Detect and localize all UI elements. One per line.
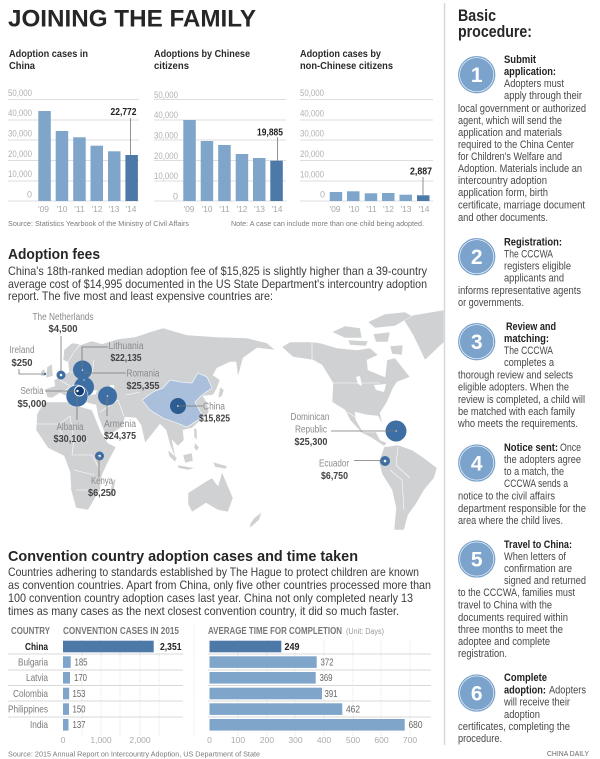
text block: convention intro: 100 convention country adoption cases last year. China not only completed nearly 13 [8, 591, 413, 605]
label: Romania: Romania [126, 368, 160, 380]
axis: days: 300 [288, 735, 303, 745]
axis labels: 30,000 [8, 128, 32, 138]
label: The Netherlands: The Netherlands [32, 312, 94, 323]
axis labels: 30,000 [154, 130, 178, 140]
text block: adoption fees intro: average cost of $14,995 documented in the US State Department's intercountry adoption [8, 277, 427, 291]
heading: procedure: [458, 23, 532, 41]
heading: non-Chinese citizens [300, 60, 393, 72]
map land masses [36, 310, 444, 530]
step 5: travel to China with the [458, 600, 552, 612]
step 4: CCCWA sends a [504, 478, 569, 490]
step 5: registration. [458, 648, 507, 660]
axis labels: 40,000 [8, 108, 32, 118]
step 2: registers eligible [504, 260, 571, 272]
label: Ecuador: $6,750 [321, 470, 348, 482]
year labels [38, 204, 137, 214]
source note: Source: Statistics Yearbook of the Ministry of Civil Affairs [8, 219, 189, 228]
year labels: '13 [254, 204, 265, 214]
step 2: informs representative agents [458, 285, 581, 297]
label: Serbia [18, 386, 47, 410]
year labels: '14 [271, 204, 283, 214]
step 5: three months to meet the [458, 624, 563, 636]
bars [330, 191, 430, 201]
country names: Latvia [26, 672, 48, 684]
label: Dominican Republic: $25,300 [294, 436, 328, 448]
axis labels: 10,000 [300, 170, 324, 180]
step 6: procedure. [458, 733, 502, 745]
step 1 [458, 54, 586, 224]
axis labels: 50,000 [300, 88, 324, 98]
label: Ecuador: Ecuador [319, 458, 350, 470]
step 3: who meets the requirements. [457, 418, 578, 430]
label: Albania [54, 422, 87, 445]
icon: number 1: 1 [471, 64, 483, 87]
step 3: Review and [506, 321, 556, 333]
axis: cases [61, 735, 151, 745]
label: Armenia [104, 419, 136, 442]
axis labels: 20,000 [8, 149, 32, 159]
axis: cases: 0 [61, 735, 66, 745]
axis: days: 500 [346, 735, 360, 745]
step 4: area where the child lives. [458, 515, 563, 527]
bars [38, 111, 138, 201]
panel: basic procedure [457, 7, 586, 745]
step 1: Adopters must [504, 78, 564, 90]
step 4: to a match, the [504, 466, 564, 478]
step 1: Submit [504, 54, 536, 66]
step 1: apply through their [504, 90, 582, 102]
year labels: '10 [201, 204, 213, 214]
country names: Colombia [13, 688, 48, 700]
bar chart: average time: 249 [284, 641, 300, 653]
label: Albania: $30,100 [54, 433, 87, 445]
bar chart: average time: 391 [324, 688, 338, 700]
label: Dominican Republic: Republic [295, 424, 327, 436]
bar chart: average time: 680 [408, 719, 423, 731]
step 5: Travel to China: [504, 539, 572, 551]
step 3: eligible adopters. When the [458, 382, 569, 394]
title: JOINING THE FAMILY [8, 6, 256, 32]
label: The Netherlands [32, 312, 94, 335]
label: Serbia: Serbia [20, 386, 44, 397]
step 5: documents required within [458, 612, 568, 624]
axis: days [207, 735, 417, 745]
text block: adoption fees intro: China's 18th-ranked median adoption fee of $15,825 is slightly higher than a 39-country [8, 264, 427, 278]
year labels: '11 [74, 204, 85, 214]
table headers: CONVENTION CASES IN 2015 [63, 626, 179, 637]
heading: Basic [458, 7, 496, 25]
bubbles [44, 360, 407, 466]
label: Lithuania [108, 341, 144, 364]
year labels [183, 204, 283, 214]
step 6: Adopters [549, 684, 586, 696]
step 3: completes a [504, 357, 555, 369]
leader lines [19, 336, 396, 477]
axis labels: 40,000 [154, 110, 178, 120]
step 5: signed and returned [504, 575, 586, 587]
year labels: '12 [91, 204, 103, 214]
step 5: adoptee and complete [458, 636, 550, 648]
callout: 22,772 [110, 107, 137, 155]
text block: convention intro [8, 565, 431, 618]
label: Armenia: $24,375 [104, 430, 136, 442]
axis labels: 0 [173, 192, 178, 202]
text block: adoption fees intro [8, 264, 427, 303]
year labels: '11 [219, 204, 230, 214]
axis labels: 0 [320, 190, 325, 200]
panel: adoptions by Chinese citizens chart [154, 48, 286, 214]
heading: adoption fees: Adoption fees [8, 246, 100, 263]
label: Ireland: $250 [12, 357, 33, 369]
bar chart: convention cases [63, 641, 182, 731]
axis labels: 0 [27, 190, 32, 200]
year labels: '09 [38, 204, 49, 214]
step 3: matching: [504, 333, 549, 345]
chart note: Note: A case can include more than one child being adopted. [231, 219, 424, 228]
bar chart: convention cases: 185 [74, 656, 88, 668]
heading: citizens [154, 60, 189, 72]
step 4: Notice sent: [504, 442, 558, 454]
callout: 19,885: 19,885 [257, 128, 283, 138]
axis: cases: 2,000 [129, 735, 151, 745]
text block: convention intro: Countries adhering to standards established by The Hague to protect children are known [8, 565, 419, 579]
year labels: '12 [236, 204, 248, 214]
axis labels: 50,000 [154, 90, 178, 100]
credit: China Daily: CHINA DAILY [547, 749, 589, 758]
step 3 [457, 321, 585, 430]
label: Armenia: Armenia [104, 419, 136, 430]
step 1: for Children's Welfare and [458, 151, 562, 163]
callout: 2,887 [410, 166, 432, 195]
step 2: or governments. [458, 297, 524, 309]
world map [10, 310, 444, 530]
step 1: application form, birth [458, 187, 548, 199]
country borders [36, 342, 410, 510]
label: Ireland [10, 345, 34, 369]
callout: 2,887: 2,887 [410, 166, 432, 178]
heading [300, 48, 393, 72]
bar chart: average time [210, 641, 423, 731]
step 3: thorough review and selects [458, 370, 573, 382]
step 6: will receive their [503, 696, 570, 708]
bar chart: convention cases: 153 [72, 688, 86, 700]
year labels: '12 [383, 204, 394, 214]
step 5: to the CCCWA, families must [458, 587, 575, 599]
year labels: '09 [329, 204, 341, 214]
heading: convention country: Convention country adoption cases and time taken [8, 548, 358, 565]
bubble centres [60, 369, 397, 462]
country names: Philippines [8, 704, 48, 716]
table headers: COUNTRY [11, 626, 50, 637]
heading [154, 48, 250, 72]
step 5: confirmation are [504, 563, 572, 575]
bar chart: average time: 372 [320, 656, 334, 668]
step 2: Registration: [504, 236, 562, 248]
icon: number 4: 4 [471, 452, 483, 476]
heading: China [9, 60, 35, 72]
year labels [329, 204, 430, 214]
text block: convention intro: as convention countries. Apart from China, only five other countries processed more than [8, 578, 431, 592]
heading: Adoptions by Chinese [154, 48, 250, 60]
step 3: The CCCWA [504, 345, 554, 357]
axis: days: 700 [403, 735, 417, 745]
axis labels [154, 90, 178, 202]
label: Kenya: Kenya [91, 476, 113, 487]
step 4: the adopters agree [504, 454, 581, 466]
label: Lithuania: Lithuania [108, 341, 144, 352]
axis labels [300, 88, 325, 200]
country names: Bulgaria [18, 656, 48, 668]
step 6: adoption [504, 709, 540, 721]
step 2: applicants and [504, 272, 564, 284]
icon: number 1 [459, 57, 495, 93]
axis: days: 200 [260, 735, 274, 745]
heading: Adoption cases in [9, 48, 88, 60]
label: Dominican Republic [290, 412, 330, 448]
axis: days: 400 [317, 735, 331, 745]
step 5: When letters of [504, 551, 567, 563]
year labels: '13 [108, 204, 120, 214]
step 6: certificates, completing the [458, 721, 570, 733]
panel: adoption cases by non-Chinese citizens chart [300, 48, 433, 214]
step 6: adoption: [504, 684, 546, 696]
callout: 22,772: 22,772 [110, 107, 137, 118]
icon: number 2: 2 [471, 246, 483, 269]
label: Albania: Albania [56, 422, 84, 433]
icon: number 5: 5 [471, 548, 483, 572]
axis labels [8, 88, 32, 200]
label: Ireland: Ireland [10, 345, 34, 356]
axis labels: 10,000 [8, 169, 32, 179]
step 6 [458, 672, 586, 745]
axis labels: 40,000 [300, 108, 324, 118]
axis labels: 30,000 [300, 128, 324, 138]
label: Kenya [88, 476, 116, 499]
label: Romania: $25,355 [126, 380, 160, 392]
heading [458, 7, 532, 41]
year labels: '14 [125, 204, 137, 214]
label: Ecuador [319, 458, 350, 482]
step 1: application and materials [458, 127, 562, 139]
bar chart: average time: 462 [346, 704, 360, 716]
label: China: China [203, 402, 225, 412]
bar chart: average time: 369 [320, 672, 333, 684]
axis labels: 20,000 [300, 149, 324, 159]
text block: adoption fees intro: report. The five most and least expensive countries are: [8, 289, 273, 303]
axis: days: 600 [374, 735, 389, 745]
panel: adoption cases in China chart [8, 48, 139, 214]
bars [183, 120, 283, 201]
axis labels: 50,000 [8, 88, 32, 98]
year labels: '13 [400, 204, 412, 214]
axis: cases: 1,000 [90, 735, 112, 745]
table headers [11, 626, 384, 637]
label: Lithuania: $22,135 [110, 352, 142, 364]
bar chart: convention cases: 2,351 [160, 641, 182, 653]
step 4 [458, 442, 586, 527]
icon: number 6: 6 [471, 682, 483, 706]
step 4: notice to the civil affairs [458, 490, 555, 502]
axis: days: 100 [231, 735, 245, 745]
label: Serbia: $5,000 [18, 398, 47, 410]
label: China: $15,825 [199, 412, 230, 424]
step 4: Once [560, 442, 581, 454]
step 2: The CCCWA [504, 248, 554, 260]
panel: convention table [8, 625, 431, 745]
year labels: '10 [56, 204, 68, 214]
callout: 19,885 [257, 128, 283, 161]
step 1: agent, which will send the [458, 115, 562, 127]
heading [9, 48, 88, 72]
axis labels: 10,000 [154, 171, 178, 181]
step 3: be matched with each family [458, 406, 575, 418]
bar chart: convention cases: 170 [74, 672, 87, 684]
label: The Netherlands: $4,500 [48, 323, 78, 335]
year labels: '09 [183, 204, 195, 214]
country names: India [30, 719, 48, 731]
label: China [199, 402, 230, 424]
table headers: AVERAGE TIME FOR COMPLETION [208, 626, 342, 637]
country names: China [25, 641, 48, 653]
label: Dominican Republic: Dominican [290, 412, 330, 423]
map highlight: China [142, 373, 212, 427]
axis labels: 20,000 [154, 151, 178, 161]
source: convention table: Source: 2015 Annual Report on Intercountry Adoption, US Department of State [8, 750, 260, 758]
country names [8, 641, 48, 731]
step 1: and other documents. [458, 212, 548, 224]
step 2 [458, 236, 581, 309]
bar chart: convention cases: 137 [72, 719, 86, 731]
year labels: '11 [366, 204, 377, 214]
step 1: required to the China Center [458, 139, 574, 151]
icon: number 3: 3 [471, 331, 483, 354]
text block: convention intro: times as many cases as the next closest convention country, it did so much faster. [8, 604, 399, 618]
axis: days: 0 [207, 735, 212, 745]
heading: Adoption cases by [300, 48, 381, 60]
bar chart: convention cases: 150 [72, 704, 86, 716]
step 6: Complete [504, 672, 547, 684]
table headers: (Unit: Days) [346, 627, 384, 636]
step 1: intercountry adoption [458, 175, 547, 187]
step 5 [458, 539, 586, 660]
label: Romania [126, 368, 160, 392]
label: Kenya: $6,250 [88, 487, 116, 499]
year labels: '14 [418, 204, 430, 214]
year labels: '10 [348, 204, 360, 214]
step 1: application: [504, 66, 556, 78]
inland seas [84, 376, 386, 396]
